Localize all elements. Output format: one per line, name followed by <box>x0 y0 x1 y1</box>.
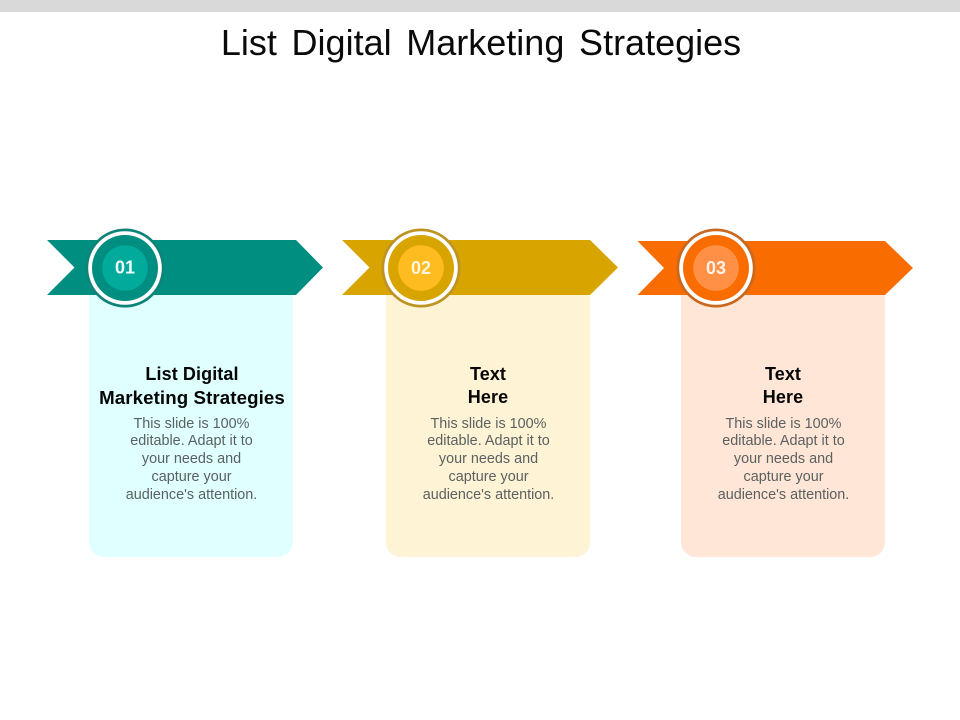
ribbon 2 with badge 02: 02 <box>411 258 431 278</box>
ribbon 2 with badge 02 <box>342 228 618 308</box>
card 2 text: capture your <box>448 469 528 485</box>
panel: card 1 <box>89 280 293 557</box>
panel: card 3 <box>681 280 885 557</box>
card 1 text: This slide is 100% <box>134 416 249 432</box>
card 2 text: This slide is 100% <box>430 416 546 432</box>
card 3 text: your needs and <box>734 451 833 467</box>
card 3 heading: Here <box>763 387 803 407</box>
card 2 text: editable. Adapt it to <box>427 433 550 449</box>
card 2 heading: Text <box>470 364 506 384</box>
card 2 heading: Here <box>468 387 508 407</box>
ribbon 1 with badge 01: 01 <box>115 258 135 278</box>
title: List Digital Marketing Strategies <box>221 22 741 63</box>
card 1 text: editable. Adapt it to <box>130 433 253 449</box>
top grey bar <box>0 0 960 12</box>
card 2 text <box>423 416 554 503</box>
card 3 text: audience's attention. <box>718 487 849 503</box>
panel: card 2 <box>386 280 590 557</box>
card 1 text: audience's attention. <box>126 487 257 503</box>
ribbon 3 with badge 03 <box>638 228 913 308</box>
ribbon 1 with badge 01 <box>47 228 323 308</box>
card 3 heading <box>763 364 803 407</box>
card 3 heading: Text <box>765 364 801 384</box>
card 2 text: your needs and <box>439 451 538 467</box>
card 1 heading: Marketing Strategies <box>99 387 285 408</box>
card 1 text <box>126 416 257 503</box>
card 2 heading <box>468 364 508 407</box>
card 1 text: your needs and <box>142 451 241 467</box>
card 1 text: capture your <box>152 469 232 485</box>
card 1 heading: List Digital <box>145 364 239 384</box>
card 3 text: editable. Adapt it to <box>722 433 845 449</box>
card 3 text: This slide is 100% <box>726 416 841 432</box>
card 1 heading <box>99 364 285 408</box>
card 3 text <box>718 416 849 503</box>
ribbon 3 with badge 03: 03 <box>706 258 726 278</box>
card 2 text: audience's attention. <box>423 487 554 503</box>
card 3 text: capture your <box>744 469 824 485</box>
